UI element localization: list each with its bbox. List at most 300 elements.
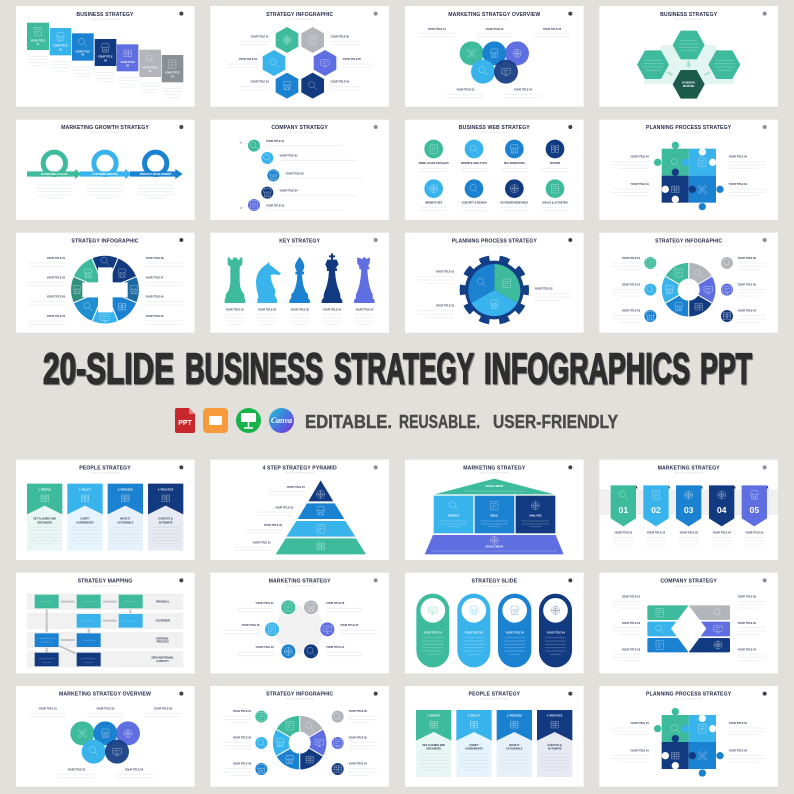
diamond labels: YOUR TITLE 02 <box>622 622 641 625</box>
slide background <box>16 573 195 673</box>
timeline labels: YOUR TITLE 05 <box>266 204 285 207</box>
pillar: email <box>475 496 514 533</box>
step 7: 07 <box>171 75 174 78</box>
timeline labels: YOUR TITLE 01 <box>266 140 285 143</box>
slide background <box>210 6 389 107</box>
column 4: 4. PRACTICE <box>547 715 563 718</box>
slide subtitle: WRITE YOUR SUBTITLE HERE <box>91 245 120 247</box>
slide title: COMPANY STRATEGY <box>271 125 328 131</box>
slide subtitle: WRITE YOUR SUBTITLE HERE <box>285 699 315 701</box>
slide background <box>405 233 584 333</box>
slide subtitle: WRITE YOUR SUBTITLE HERE <box>480 19 509 21</box>
slide subtitle: WRITE YOUR SUBTITLE HERE <box>91 699 120 701</box>
column 4: EXECUTE & <box>548 744 562 747</box>
slide: planning process puzzle <box>599 120 778 220</box>
wheel right labels: YOUR TITLE 05 <box>145 315 164 318</box>
slide subtitle: WRITE YOUR SUBTITLE HERE <box>480 699 509 701</box>
overview labels: YOUR TITLE 01 <box>39 707 57 710</box>
overview labels: YOUR TITLE 04 <box>125 768 144 771</box>
donut labels: YOUR TITLE 03 <box>233 763 252 766</box>
diamond labels: YOUR TITLE 06 <box>738 596 757 599</box>
hexagon ring <box>263 27 336 99</box>
slide: business strategy steps <box>16 6 195 107</box>
logo dot <box>568 578 572 582</box>
slide: business web strategy <box>405 120 584 220</box>
ring 1 and arrow <box>27 152 82 179</box>
pale band <box>599 489 778 515</box>
timeline labels: YOUR TITLE 03 <box>285 172 304 175</box>
puzzle labels: YOUR TITLE 04 <box>729 183 748 186</box>
step 2: YOUR TITLE <box>53 45 68 48</box>
step 2 <box>50 28 71 71</box>
ring 2 and arrow: CUSTOMER SERVICE <box>92 173 118 176</box>
slide background <box>16 460 195 560</box>
pill 4: YOUR TITLE 04 <box>546 632 565 635</box>
crop group: first row right slides <box>405 6 778 220</box>
slide background <box>210 120 389 220</box>
wheel right labels: YOUR TITLE 08 <box>145 257 164 260</box>
wheel right labels: YOUR TITLE 07 <box>145 276 164 279</box>
banner labels <box>613 531 764 547</box>
connector curve <box>241 143 275 208</box>
logo dot <box>568 125 572 129</box>
column 3: 3. PROCESS <box>118 488 133 491</box>
column 1: SET ALIGNED AND <box>33 518 56 521</box>
row labels: CAPACITY <box>156 660 169 663</box>
slide background <box>405 460 584 560</box>
slide subtitle: WRITE YOUR SUBTITLE HERE <box>674 19 704 21</box>
slide: four step pyramid <box>210 460 389 560</box>
slide title: MARKETING GROWTH STRATEGY <box>61 125 149 131</box>
crop group: last row left slides <box>16 686 389 787</box>
puzzle labels: YOUR TITLE 04 <box>630 749 649 752</box>
column 4: 4. PRACTICE <box>158 488 174 491</box>
logo dot <box>568 692 572 696</box>
main headline: 20-SLIDE <box>43 344 174 394</box>
logo dot <box>763 465 767 469</box>
column 2: 2. POLICY <box>468 715 480 718</box>
ring 3 and arrow <box>130 152 183 179</box>
slide: marketing strategy banners <box>599 460 778 560</box>
logo dot <box>179 238 183 242</box>
overview labels: YOUR TITLE 04 <box>514 89 533 92</box>
step 1 <box>27 23 49 66</box>
foundation <box>425 535 564 554</box>
chess labels: YOUR TITLE 01 <box>226 309 244 312</box>
column 4: AUTOMATE <box>159 521 173 524</box>
logo dot <box>374 125 378 129</box>
donut labels: YOUR TITLE 06 <box>738 257 757 260</box>
crop group: third row left slides <box>16 233 389 333</box>
column 2 <box>67 484 103 551</box>
banner 01: 01 <box>619 505 628 515</box>
donut labels: YOUR TITLE 05 <box>349 736 368 739</box>
column 1: SET ALIGNED AND <box>422 744 445 747</box>
pale arrows <box>667 61 710 76</box>
roof: SOCIAL MEDIA <box>485 485 504 488</box>
slide title: STRATEGY SLIDE <box>472 579 518 585</box>
wheel right labels <box>145 257 183 324</box>
banner labels: YOUR TITLE 02 <box>647 531 666 534</box>
slide background <box>599 6 778 107</box>
chess labels: YOUR TITLE 02 <box>258 309 277 312</box>
column 3: 3. PROCESS <box>507 715 522 718</box>
diamond labels: YOUR TITLE 04 <box>738 648 757 651</box>
slide: strategy infographic donut <box>599 233 778 333</box>
wheel left labels: YOUR TITLE 03 <box>47 296 66 299</box>
slide: marketing strategy overview repeat <box>16 686 195 787</box>
slide background <box>599 120 778 220</box>
step 3 <box>72 33 94 76</box>
donut side circles <box>255 711 344 775</box>
banner 04: 04 <box>717 505 727 515</box>
slide: marketing strategy house <box>405 460 584 560</box>
step 4: YOUR TITLE <box>98 56 113 59</box>
step 7 <box>162 55 183 98</box>
icon: knight <box>256 262 281 303</box>
slide: people strategy columns <box>16 460 195 560</box>
donut chart <box>661 262 716 317</box>
slide subtitle: WRITE YOUR SUBTITLE HERE <box>285 132 315 134</box>
pyramid labels: YOUR TITLE 01 <box>252 541 271 544</box>
body copy placeholders <box>36 185 174 198</box>
column 3: ACTIONABLE <box>506 748 523 751</box>
slide title: KEY STRATEGY <box>279 238 321 244</box>
slide: business mapping hexagons <box>599 6 778 107</box>
left hexagon <box>637 50 669 79</box>
slide background <box>210 233 389 333</box>
slide subtitle: WRITE YOUR SUBTITLE HERE <box>285 19 315 21</box>
slide background <box>405 120 584 220</box>
column 1: 1. PEOPLE <box>427 715 440 718</box>
row bands <box>27 593 183 667</box>
step 5 <box>117 44 138 87</box>
banner 05 <box>742 485 769 526</box>
puzzle <box>654 142 724 210</box>
donut labels: YOUR TITLE 02 <box>233 736 252 739</box>
donut labels <box>223 710 377 775</box>
gear labels: YOUR TITLE 03 <box>436 305 455 308</box>
pill 2 <box>457 594 490 667</box>
slide title: MARKETING STRATEGY OVERVIEW <box>59 692 151 698</box>
slide subtitle: WRITE YOUR SUBTITLE HERE <box>480 132 509 134</box>
logo dot <box>374 12 378 16</box>
ring labels <box>223 602 377 656</box>
puzzle labels: YOUR TITLE 04 <box>630 722 649 725</box>
step 7: YOUR TITLE <box>165 72 180 75</box>
diamond labels: YOUR TITLE 05 <box>738 622 757 625</box>
pillar: email: EMAIL <box>490 514 499 517</box>
slide title: MARKETING STRATEGY <box>658 466 720 472</box>
slide title: BUSINESS STRATEGY <box>76 12 134 18</box>
wheel left labels: YOUR TITLE 04 <box>47 315 66 318</box>
diamond labels: YOUR TITLE 03 <box>622 648 641 651</box>
web strategy labels: WEBSITE DEV <box>425 201 443 204</box>
slide: strategy mapping <box>16 573 195 673</box>
slide subtitle: WRITE YOUR SUBTITLE HERE <box>674 586 704 588</box>
row labels: ORGANIZATIONAL <box>152 656 174 659</box>
logo dot <box>179 125 183 129</box>
icon: Canva: Canva <box>271 416 292 425</box>
overview labels: YOUR TITLE 03 <box>485 28 504 31</box>
donut labels: YOUR TITLE 01 <box>622 257 641 260</box>
column 3: MAKE IT <box>120 518 131 521</box>
banner labels: YOUR TITLE 05 <box>745 531 764 534</box>
right hexagon <box>708 50 740 79</box>
web strategy labels: WEBSITE ANALYTICS <box>461 162 487 165</box>
wheel <box>71 255 139 324</box>
puzzle labels: YOUR TITLE 04 <box>729 749 748 752</box>
web strategy labels: MORE LEADS ON SALES <box>419 162 449 165</box>
roof <box>434 479 554 494</box>
centre dark hexagon <box>673 70 705 99</box>
overview labels: YOUR TITLE 01 <box>428 28 446 31</box>
donut labels: YOUR TITLE 03 <box>622 310 641 313</box>
slide subtitle: WRITE YOUR SUBTITLE HERE <box>91 586 120 588</box>
wheel left labels: YOUR TITLE 02 <box>47 276 66 279</box>
slide background <box>599 573 778 673</box>
pale backing shape <box>644 45 734 84</box>
slide background <box>16 686 195 787</box>
slide: marketing growth strategy <box>16 120 195 220</box>
wheel left labels <box>28 257 66 324</box>
slide: planning process puzzle repeat <box>599 686 778 787</box>
logo dot <box>179 12 183 16</box>
banner 03: 03 <box>684 505 694 515</box>
web strategy labels: CONCEPT & DESIGN <box>462 201 487 204</box>
timeline labels: YOUR TITLE 04 <box>279 190 298 193</box>
slide background <box>16 120 195 220</box>
puzzle labels <box>611 722 766 762</box>
slide subtitle: WRITE YOUR SUBTITLE HERE <box>285 473 315 475</box>
overlapping circles <box>70 721 140 764</box>
banner 03 <box>676 485 703 526</box>
icon: PowerPoint file: PPT <box>178 420 193 427</box>
icon: Google Slides <box>203 408 228 433</box>
pillar: analysis <box>516 496 555 533</box>
column 3 <box>497 710 532 777</box>
pill 2: YOUR TITLE 02 <box>465 632 484 635</box>
slide: key strategy chess pieces <box>210 233 389 333</box>
overview labels: YOUR TITLE 05 <box>543 28 562 31</box>
row labels: CUSTOMER <box>156 620 170 623</box>
row labels: PROCESS <box>157 641 169 644</box>
gear chart <box>463 259 525 321</box>
icon: Canva <box>269 408 294 433</box>
wheel left labels: YOUR TITLE 01 <box>47 257 66 260</box>
tagline: EDITABLE. <box>305 412 392 432</box>
logo dot <box>568 238 572 242</box>
icon: rook <box>225 258 245 303</box>
row labels: INTERNAL <box>156 637 169 640</box>
slide subtitle: WRITE YOUR SUBTITLE HERE <box>674 473 704 475</box>
step 4 <box>95 39 116 82</box>
slide subtitle: WRITE YOUR SUBTITLE HERE <box>674 132 704 134</box>
right labels: YOUR TITLE 04 <box>331 81 350 84</box>
slide subtitle: WRITE YOUR SUBTITLE HERE <box>674 245 704 247</box>
slide background <box>210 573 389 673</box>
logo dot <box>374 692 378 696</box>
left labels: YOUR TITLE 03 <box>250 81 269 84</box>
column 2: AGREEMENTS <box>465 748 483 751</box>
pill 1: YOUR TITLE 01 <box>424 632 443 635</box>
logo dot <box>763 578 767 582</box>
overview labels: YOUR TITLE 05 <box>154 707 173 710</box>
slide background <box>16 233 195 333</box>
slide title: PEOPLE STRATEGY <box>79 466 131 472</box>
crop group: fourth row left slides <box>16 460 389 673</box>
donut chart <box>272 715 327 770</box>
slide: company strategy diamond <box>599 573 778 673</box>
slide title: STRATEGY MAPPING <box>78 579 132 585</box>
column 1: ORGANIZED <box>426 748 441 751</box>
column 4: AUTOMATE <box>548 748 562 751</box>
row labels <box>152 600 174 663</box>
ring 2 and arrow <box>80 152 132 179</box>
web strategy labels <box>419 162 568 211</box>
bottom slide grid <box>16 460 778 787</box>
logo dot <box>568 12 572 16</box>
pillar: search: SEARCH <box>448 514 459 517</box>
slide title: MARKETING STRATEGY <box>463 466 526 472</box>
pill 4 <box>539 594 572 667</box>
logo dot <box>179 692 183 696</box>
slide: strategy slide pills <box>405 573 584 673</box>
overlapping circles <box>460 41 529 84</box>
chess labels: YOUR TITLE 03 <box>291 309 309 312</box>
slide: company strategy timeline <box>210 120 389 220</box>
logo dot <box>374 238 378 242</box>
slide title: STRATEGY INFOGRAPHIC <box>266 12 333 18</box>
slide subtitle: WRITE YOUR SUBTITLE HERE <box>480 245 509 247</box>
crop group: fourth row right slides <box>405 460 778 673</box>
banner labels: YOUR TITLE 03 <box>680 531 698 534</box>
slide background <box>210 686 389 787</box>
connector arrows <box>47 602 130 653</box>
overview labels: YOUR TITLE 02 <box>67 768 86 771</box>
overview labels: YOUR TITLE 03 <box>96 707 115 710</box>
step 5: 05 <box>126 65 130 68</box>
timeline labels <box>266 140 363 210</box>
ring labels: YOUR TITLE 05 <box>340 624 359 627</box>
slide title: PLANNING PROCESS STRATEGY <box>646 692 732 698</box>
slide: marketing strategy overview <box>405 6 584 107</box>
step 1: YOUR TITLE <box>31 39 46 42</box>
column 1 <box>416 710 451 777</box>
slide background <box>599 686 778 787</box>
slide: planning process gear <box>405 233 584 333</box>
logo dot <box>763 238 767 242</box>
pillar: analysis: ANALYSIS <box>529 514 542 517</box>
wheel right labels: YOUR TITLE 06 <box>145 296 164 299</box>
slide title: MARKETING STRATEGY <box>269 579 331 585</box>
overview labels <box>418 28 570 98</box>
web strategy labels: TESTING <box>550 162 560 165</box>
slide background <box>599 460 778 560</box>
step 4: 04 <box>104 59 107 62</box>
icon: PowerPoint file <box>175 408 195 433</box>
pyramid <box>276 480 366 554</box>
column 1 <box>27 484 62 551</box>
ring 1 and arrow: MARKETING & SALES <box>41 173 68 176</box>
column 3: MAKE IT <box>509 744 520 747</box>
slide subtitle: WRITE YOUR SUBTITLE HERE <box>285 586 315 588</box>
chess labels: YOUR TITLE 05 <box>355 309 374 312</box>
right labels <box>331 35 373 90</box>
tagline: REUSABLE. <box>399 412 480 432</box>
donut labels: YOUR TITLE 02 <box>622 283 641 286</box>
step 3: YOUR TITLE <box>75 50 90 53</box>
web strategy labels: GOALS & ACTIVITIES <box>542 201 568 204</box>
row labels: FINANCIAL <box>156 600 170 603</box>
column 4 <box>537 710 572 777</box>
banner 02: 02 <box>651 505 661 515</box>
top slide grid <box>16 6 778 333</box>
pyramid labels: YOUR TITLE 04 <box>286 486 305 489</box>
overview labels: YOUR TITLE 02 <box>456 89 475 92</box>
slide title: STRATEGY INFOGRAPHIC <box>266 692 333 698</box>
diamond labels: YOUR TITLE 01 <box>622 596 641 599</box>
logo dot <box>763 12 767 16</box>
slide title: 4 STEP STRATEGY PYRAMID <box>263 466 337 472</box>
banner 05: 05 <box>750 505 759 515</box>
logo dot <box>568 465 572 469</box>
left labels: YOUR TITLE 01 <box>250 35 269 38</box>
ring 3 and arrow: PRODUCT DEVELOPMENT <box>140 173 172 176</box>
right labels: YOUR TITLE 06 <box>331 35 350 38</box>
slide title: BUSINESS STRATEGY <box>660 12 718 18</box>
timeline nodes <box>240 140 279 211</box>
chess labels <box>225 309 374 324</box>
slide: strategy infographic hexagons <box>210 6 389 107</box>
slide background <box>405 573 584 673</box>
donut labels: YOUR TITLE 04 <box>349 763 368 766</box>
puzzle <box>654 708 724 777</box>
pill 3: YOUR TITLE 03 <box>506 632 524 635</box>
step 3: 03 <box>81 54 85 57</box>
slide: strategy infographic wheel <box>16 233 195 333</box>
main headline: STRATEGY <box>334 344 474 394</box>
slide subtitle: WRITE YOUR SUBTITLE HERE <box>480 586 509 588</box>
puzzle labels: YOUR TITLE 04 <box>729 156 748 159</box>
column 2: CODIFY <box>469 744 479 747</box>
top hexagon <box>673 31 705 59</box>
slide background <box>405 6 584 107</box>
banner 04 <box>709 485 736 526</box>
ring labels: YOUR TITLE 06 <box>326 602 345 605</box>
column 1: 1. PEOPLE <box>38 488 51 491</box>
donut side circles <box>644 257 733 322</box>
ring of circles <box>264 599 335 659</box>
web strategy labels: SEO MARKETING <box>504 162 525 165</box>
banner labels: YOUR TITLE 01 <box>614 531 633 534</box>
slide subtitle: WRITE YOUR SUBTITLE HERE <box>674 699 704 701</box>
donut labels: YOUR TITLE 05 <box>738 283 757 286</box>
logo dot <box>179 578 183 582</box>
donut labels: YOUR TITLE 06 <box>349 710 368 713</box>
gear labels <box>416 271 571 317</box>
ring labels: YOUR TITLE 03 <box>255 646 274 649</box>
crop group: third row right slides <box>405 233 778 333</box>
pale blob <box>276 605 324 653</box>
centre dark hexagon: BUSINESS <box>682 82 695 85</box>
slide background <box>210 460 389 560</box>
diamond labels <box>612 596 766 661</box>
overview labels <box>29 707 181 778</box>
slide: strategy infographic donut repeat <box>210 686 389 787</box>
donut labels: YOUR TITLE 04 <box>738 310 757 313</box>
ring labels: YOUR TITLE 01 <box>255 602 274 605</box>
